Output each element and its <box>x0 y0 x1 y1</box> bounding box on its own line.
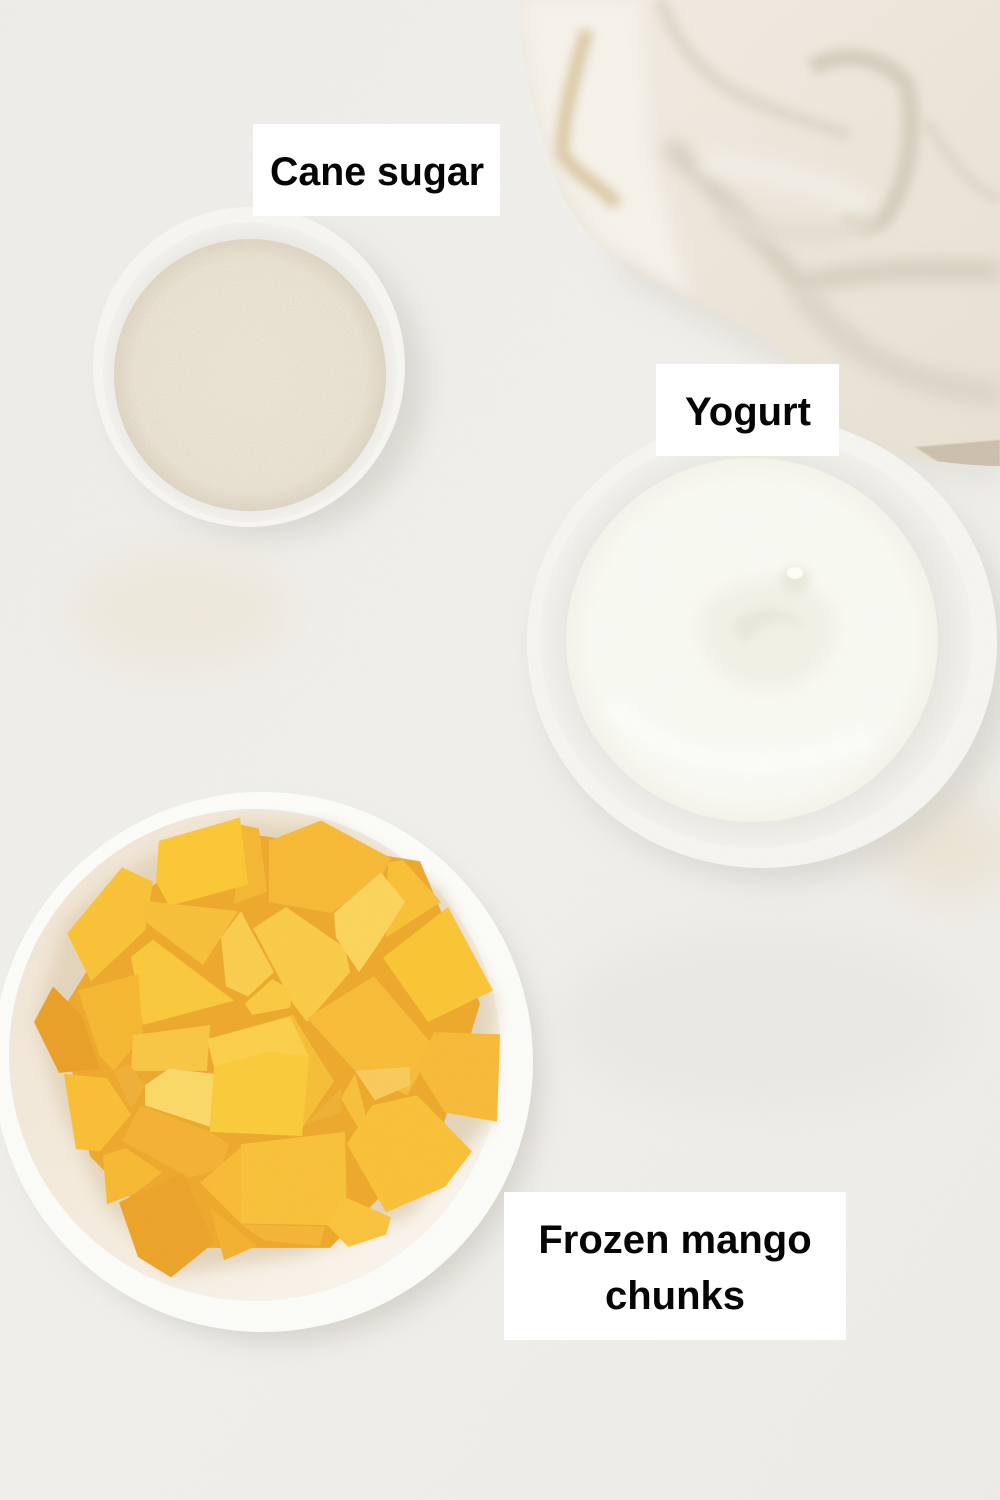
label: frozen mango chunks: chunks <box>605 1274 745 1318</box>
cloth napkin <box>518 0 1000 485</box>
bowl: cane sugar <box>93 207 426 537</box>
yogurt <box>566 458 938 822</box>
label: yogurt <box>656 364 839 456</box>
label: cane sugar <box>253 124 500 216</box>
label: frozen mango chunks: Frozen mango <box>538 1218 812 1262</box>
bowl: yogurt <box>527 416 1000 882</box>
label: frozen mango chunks <box>504 1192 846 1340</box>
sugar <box>110 235 390 515</box>
label: yogurt: Yogurt <box>685 390 811 434</box>
label: cane sugar: Cane sugar <box>270 150 484 194</box>
bowl: frozen mango chunks <box>0 792 540 1342</box>
mango chunks <box>34 817 500 1277</box>
